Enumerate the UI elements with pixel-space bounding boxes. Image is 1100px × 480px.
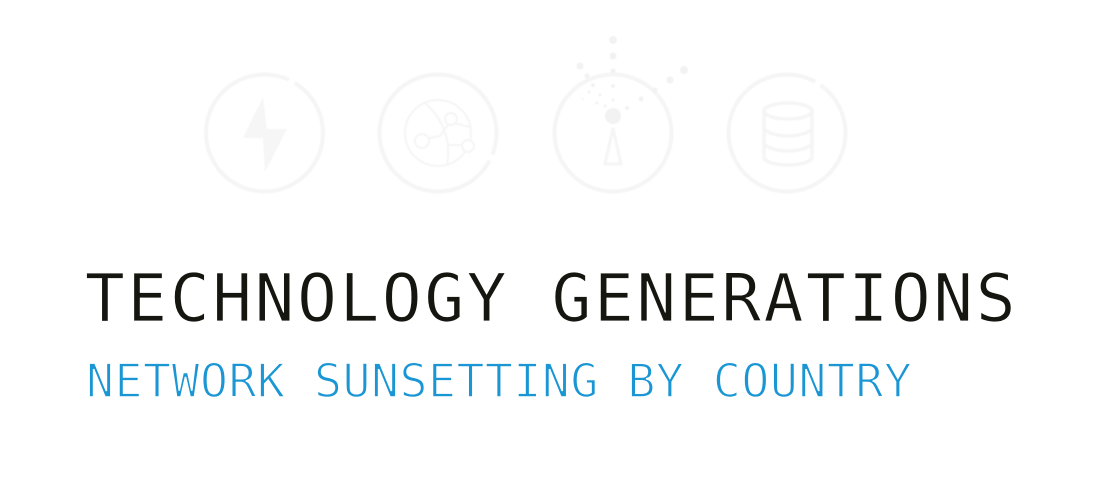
subtitle: NETWORK SUNSETTING BY COUNTRY (86, 354, 912, 408)
icon: database cylinder in ring (706, 52, 868, 214)
signal dots (576, 36, 688, 110)
title: TECHNOLOGY GENERATIONS (85, 260, 1018, 337)
icon: lightning bolt in ring (184, 53, 345, 213)
icon: globe with network nodes in ring (359, 54, 517, 212)
antenna tower (605, 108, 621, 124)
globe network (405, 100, 474, 166)
lightning bolt (243, 97, 287, 172)
icon: antenna with signal dots in ring (554, 36, 688, 192)
database stack (764, 103, 812, 165)
